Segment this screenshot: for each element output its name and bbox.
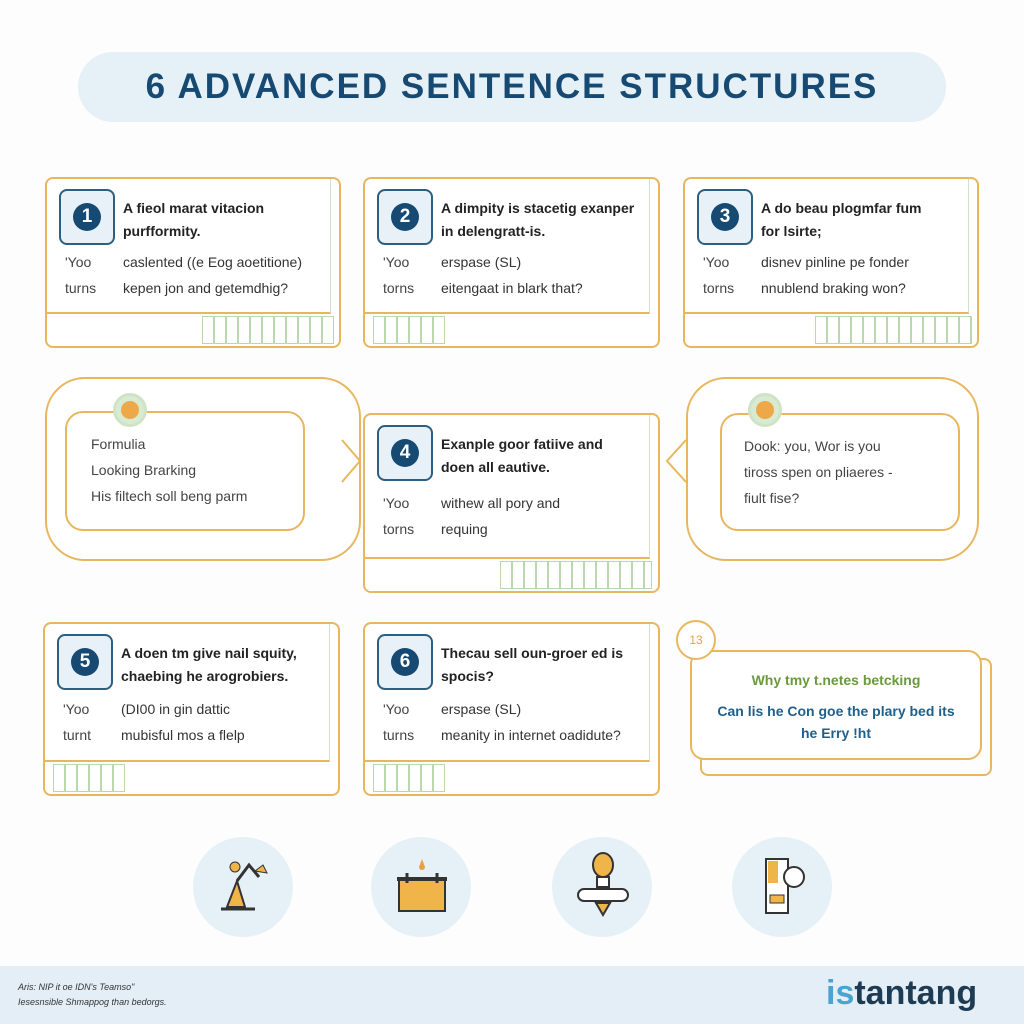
card 1: kepen jon and getemdhig? [123,280,288,296]
callout: Can lis he Con goe the plary bed its [717,703,955,719]
card 1: turns [65,280,96,296]
card 1: purfformity. [123,223,201,239]
footer [0,966,1024,1024]
card 5: turnt [63,727,91,743]
bubble left: Formulia [91,436,145,452]
card 3: 'Yoo [703,254,729,270]
card 2: erspase (SL) [441,254,521,270]
card 5 [43,622,340,796]
card 4: 4 [400,442,410,463]
bubble right: fiult fise? [744,490,799,506]
card 2: A dimpity is stacetig exanper [441,200,634,216]
icon: bulb stamp [552,837,652,937]
card 2: 2 [400,206,410,227]
card 1: caslented ((e Eog aoetitione) [123,254,302,270]
card 2 [363,177,660,348]
card 5: mubisful mos a flelp [121,727,245,743]
card 1: A fieol marat vitacion [123,200,264,216]
card 2: in delengratt-is. [441,223,545,239]
card 6: 'Yoo [383,701,409,717]
card 5: 5 [80,651,90,672]
card 6: erspase (SL) [441,701,521,717]
footer: istantang [826,974,977,1012]
card 3: for lsirte; [761,223,822,239]
card 5: (DI00 in gin dattic [121,701,230,717]
card 6: turns [383,727,414,743]
callout: 13 [689,633,703,647]
card 6: Thecau sell oun-groer ed is [441,645,623,661]
bubble left: His filtech soll beng parm [91,488,247,504]
card 4: doen all eautive. [441,459,550,475]
card 1: 1 [82,206,92,227]
bubble right: Dook: you, Wor is you [744,438,881,454]
card 4: Exanple goor fatiive and [441,436,603,452]
card 5: 'Yoo [63,701,89,717]
arrow: left bubble tail [341,439,362,483]
card 3: torns [703,280,734,296]
card 2: torns [383,280,414,296]
card 3: disnev pinline pe fonder [761,254,909,270]
arrow: right bubble tail [666,439,686,483]
card 3: 3 [720,206,730,227]
card 3: A do beau plogmfar fum [761,200,921,216]
bubble right: tiross spen on pliaeres - [744,464,893,480]
card 6: meanity in internet oadidute? [441,727,621,743]
card 4: requing [441,521,488,537]
title: 6 ADVANCED SENTENCE STRUCTURES [146,67,878,106]
card 4: withew all pory and [441,495,560,511]
card 2: 'Yoo [383,254,409,270]
card 6 [363,622,660,796]
icon: calendar [371,837,471,937]
callout [676,620,992,776]
card 1: 'Yoo [65,254,91,270]
icon: worker [193,837,293,937]
card 1 [45,177,341,348]
card 3 [683,177,979,348]
icon: machine [732,837,832,937]
card 6: spocis? [441,668,494,684]
card 6: 6 [400,651,410,672]
footer: Aris: NIP it oe IDN's Teamso" [18,982,134,992]
card 5: chaebing he arogrobiers. [121,668,288,684]
card 5: A doen tm give nail squity, [121,645,297,661]
card 3: nnublend braking won? [761,280,906,296]
callout: he Erry !ht [801,725,871,741]
card 4 [363,413,660,593]
footer: Iesesnsible Shmappog than bedorgs. [18,997,167,1007]
callout: Why tmy t.netes betcking [752,672,920,688]
card 2: eitengaat in blark that? [441,280,583,296]
bubble left [45,377,361,561]
bubble left: Looking Brarking [91,462,196,478]
card 4: 'Yoo [383,495,409,511]
card 4: torns [383,521,414,537]
title [78,52,946,122]
bubble right [686,377,979,561]
